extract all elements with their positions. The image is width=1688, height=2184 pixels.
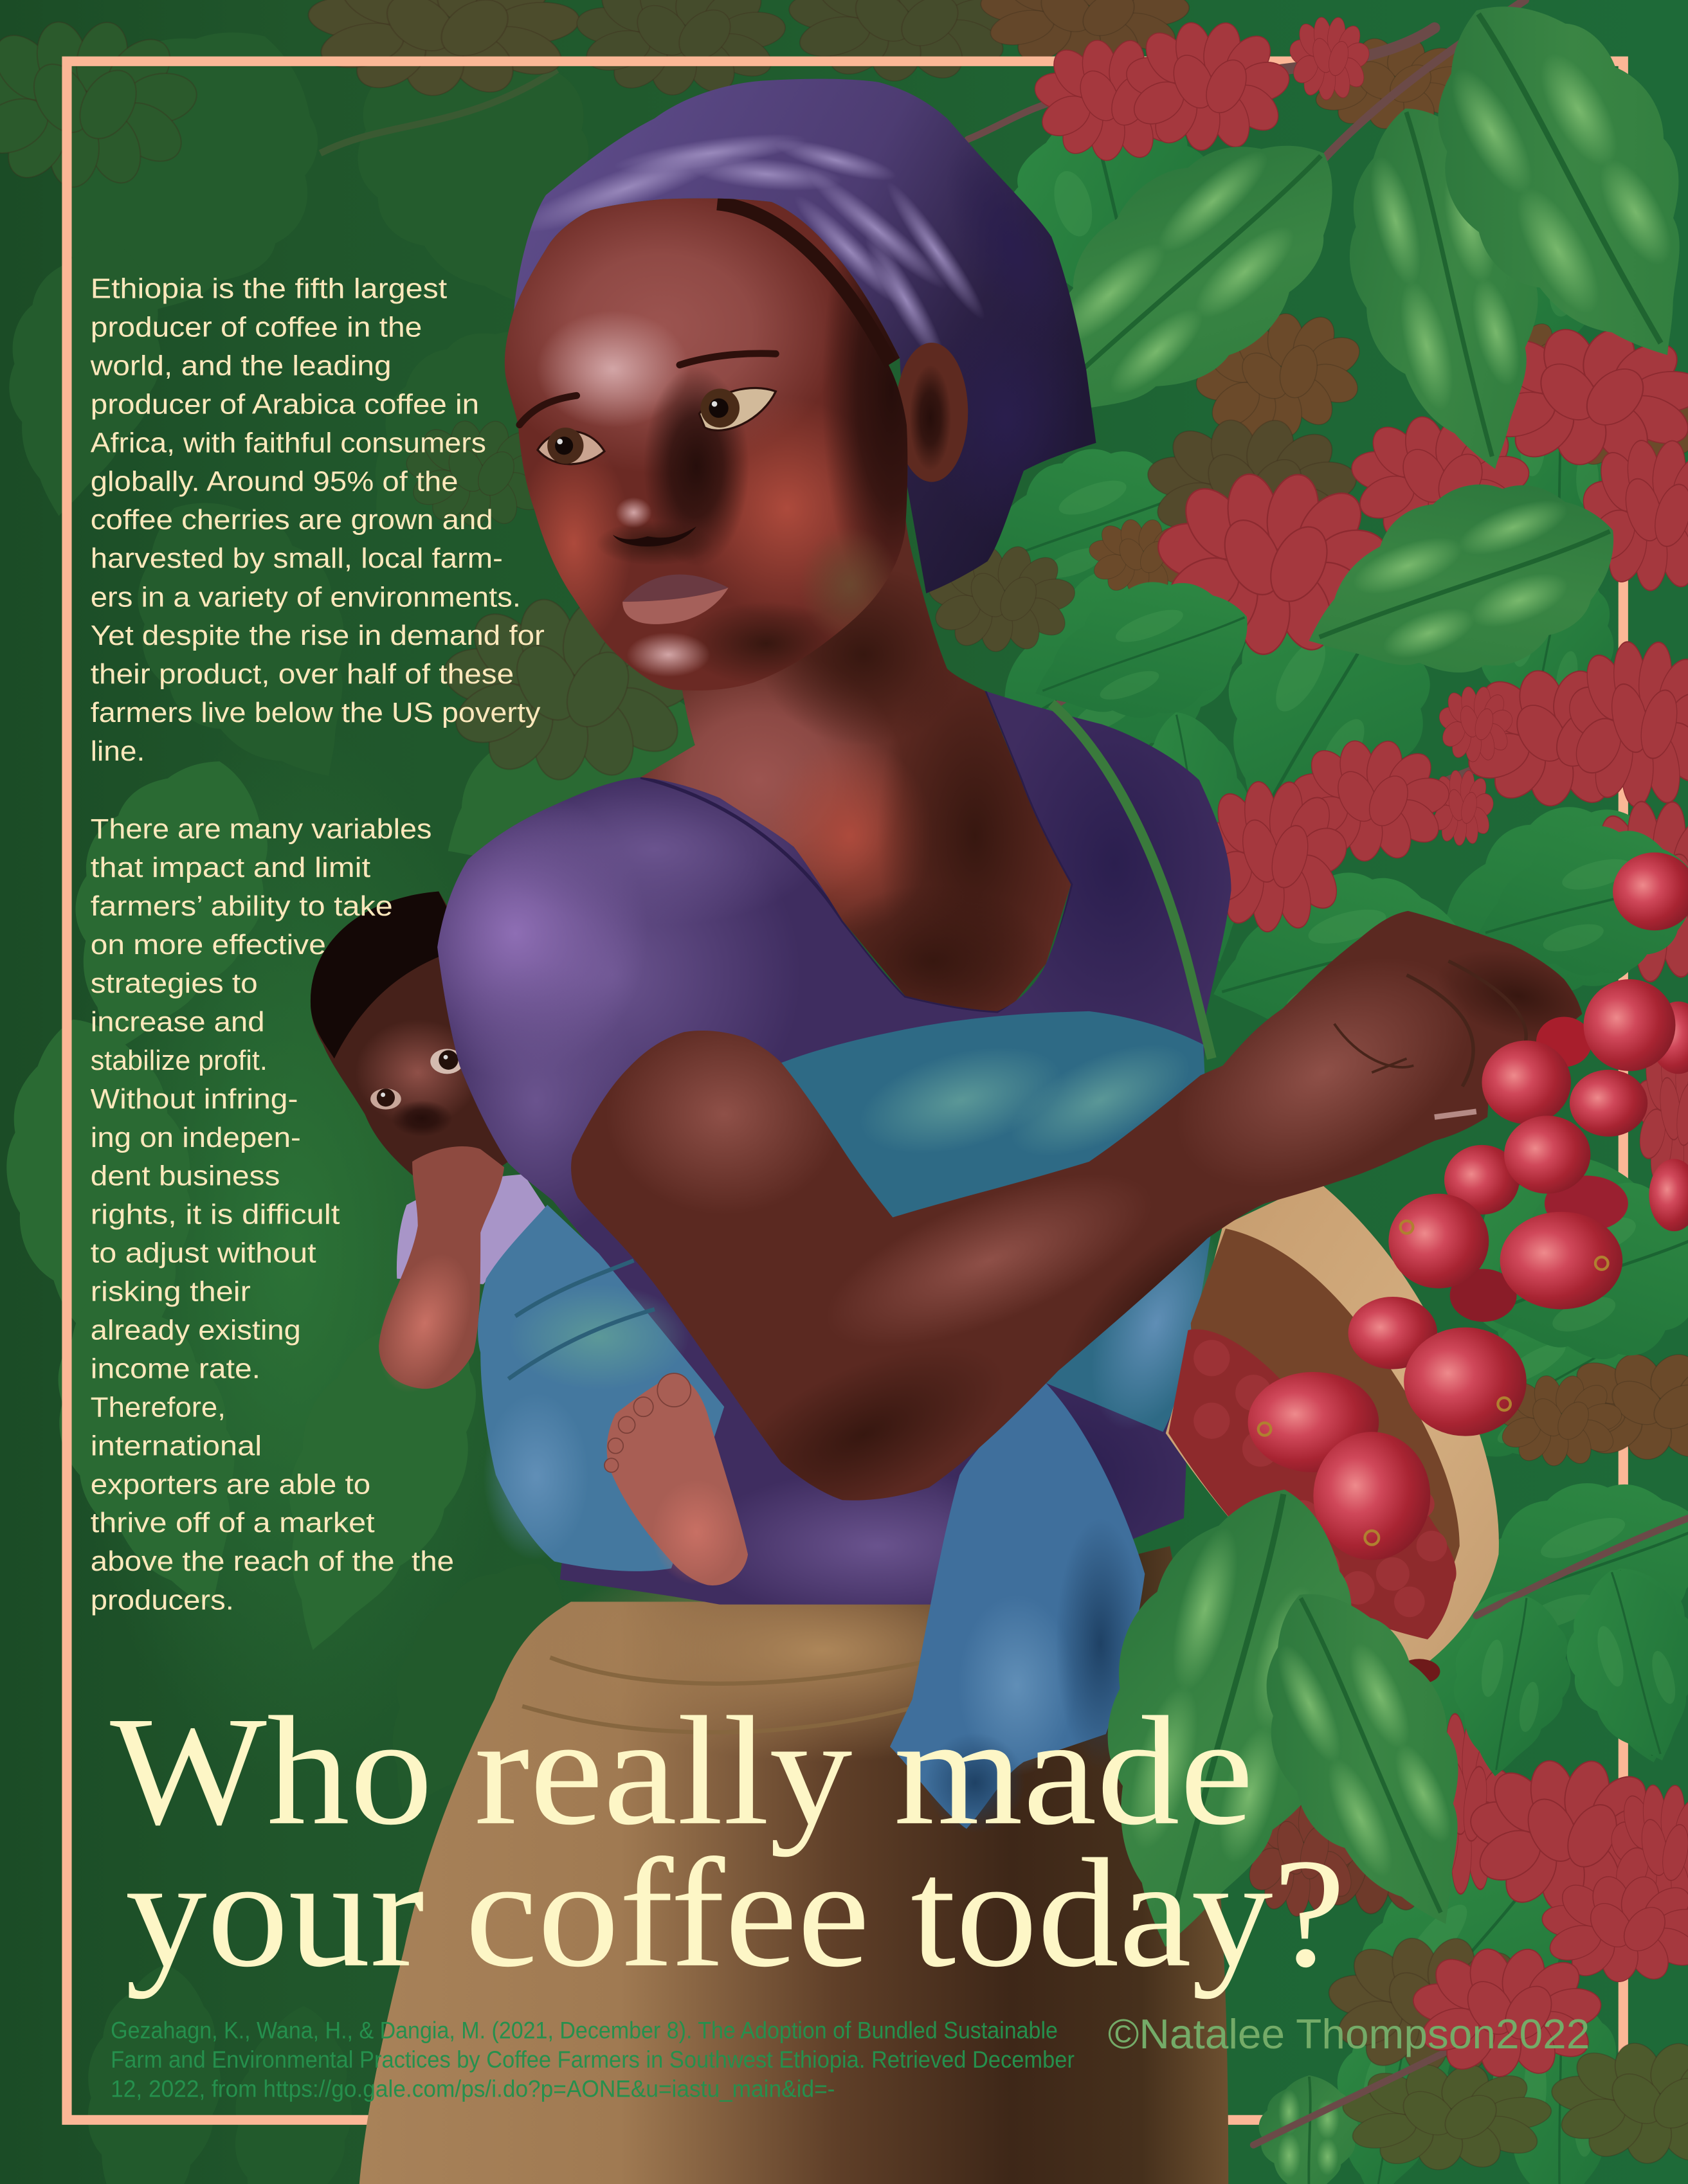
big ripe coffee cherries: [1248, 853, 1688, 1560]
figure: baby foot: [604, 1373, 748, 1585]
text block: Ethiopia paragraph: ers in a variety of environments.: [91, 582, 521, 613]
text block: variables paragraph: thrive off of a market: [91, 1508, 375, 1539]
coffee branches: [968, 0, 1688, 2145]
figure: face: [504, 198, 908, 690]
text block: Ethiopia paragraph: coffee cherries are grown and: [91, 505, 493, 536]
copyright credit: ©Natalee Thompson2022: [1108, 2010, 1590, 2057]
coffee plant foliage: back layer leaves: [945, 82, 1688, 2184]
text block: variables paragraph: Therefore,: [91, 1392, 226, 1423]
text block: variables paragraph: rights, it is difficult: [91, 1200, 340, 1231]
upper large leaves: [963, 0, 1688, 1786]
text block: variables paragraph: Without infring-: [91, 1084, 298, 1115]
text block: variables paragraph: There are many variables: [91, 814, 431, 845]
figure: baby arm and hand: [361, 1146, 504, 1405]
eye: left: [538, 428, 604, 464]
baby eyes: [370, 1049, 464, 1110]
basket: red cherries inside: [1168, 1330, 1457, 1639]
text block: Ethiopia paragraph: Africa, with faithful consumers: [91, 428, 486, 458]
figure: purple blouse: [437, 690, 1231, 1605]
text block: Ethiopia paragraph: Ethiopia is the fifth largest: [91, 274, 447, 305]
title: Who really made: [110, 1685, 1253, 1857]
foreground large leaves: [1052, 1460, 1525, 1976]
text block: variables paragraph: producers.: [91, 1585, 234, 1616]
coffee cherry clusters: [1032, 15, 1688, 2079]
text block: Ethiopia paragraph: world, and the leading: [90, 351, 392, 382]
text block: Ethiopia paragraph: farmers live below the US poverty: [91, 698, 541, 728]
text block: variables paragraph: risking their: [91, 1276, 251, 1307]
lips: [622, 574, 729, 624]
figure: green basket strap: [1051, 703, 1212, 1059]
text block: Ethiopia paragraph: Yet despite the rise in demand for: [91, 620, 545, 651]
text block: variables paragraph: already existing: [91, 1315, 301, 1346]
figure: basket with cherries: [1166, 1181, 1499, 1684]
text block: variables paragraph: to adjust without: [91, 1238, 316, 1269]
eye: right: [699, 388, 776, 430]
text block: variables paragraph: increase and: [91, 1007, 265, 1038]
figure: neck and chest: [640, 520, 1071, 1011]
nose: [613, 497, 696, 546]
brows: [520, 354, 776, 425]
figure: ear: [896, 343, 968, 482]
title: your coffee today?: [125, 1827, 1345, 1999]
text block: variables paragraph: that impact and limit: [91, 853, 370, 883]
text block: Ethiopia paragraph: globally. Around 95% of the: [91, 466, 458, 497]
figure: baby shirt: [397, 1174, 547, 1284]
citation: Gezahagn, K., Wana, H., & Dangia, M. (2021, December 8). The Adoption of Bundled Sustainable: [111, 2017, 1058, 2044]
text block: variables paragraph: dent business: [91, 1161, 280, 1192]
text block: Ethiopia paragraph: producer of Arabica coffee in: [91, 389, 479, 420]
text block: variables paragraph: strategies to: [91, 968, 258, 999]
figure: skirt: [359, 1539, 1228, 2184]
citation: Farm and Environmental Practices by Coffee Farmers in Southwest Ethiopia. Retrieved December: [111, 2046, 1075, 2073]
text block: Ethiopia paragraph: harvested by small, local farm-: [91, 543, 503, 574]
figure: arm and hand: [571, 911, 1582, 1501]
faded brown coffee cherries behind the leaves: [927, 35, 1688, 2172]
figure: scarf: [502, 69, 1114, 613]
figure: blue sling tail: [890, 1383, 1145, 1833]
text block: variables paragraph: income rate.: [91, 1353, 260, 1384]
text block: variables paragraph: above the reach of the the: [91, 1546, 454, 1577]
figure: baby head: [311, 892, 515, 1190]
text block: Ethiopia paragraph: their product, over half of these: [91, 659, 514, 690]
text block: variables paragraph: international: [91, 1430, 262, 1461]
citation: 12, 2022, from https://go.gale.com/ps/i.do?p=AONE&u=iastu_main&id=-: [111, 2076, 835, 2102]
text block: Ethiopia paragraph: line.: [91, 736, 145, 767]
text block: variables paragraph: ing on indepen-: [91, 1123, 301, 1153]
figure: blue sling, lower bundle: [478, 1205, 724, 1571]
figure: blue sling, upper band: [781, 1011, 1246, 1447]
text block: variables paragraph: farmers’ ability to take: [91, 891, 393, 922]
text block: variables paragraph: stabilize profit.: [91, 1045, 268, 1076]
text block: variables paragraph: exporters are able to: [91, 1469, 370, 1500]
text block: Ethiopia paragraph: producer of coffee in the: [91, 312, 422, 343]
text block: variables paragraph: on more effective: [91, 930, 326, 961]
